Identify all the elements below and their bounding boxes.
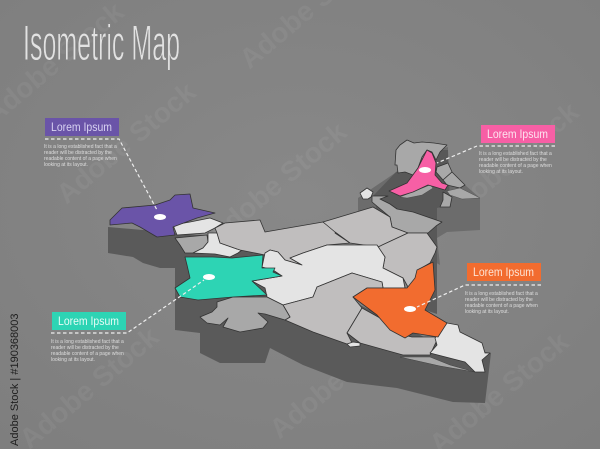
callout: orange	[404, 263, 541, 315]
map extrusion	[108, 147, 491, 403]
callout: pink: readable content of a page when	[479, 163, 552, 169]
callout: purple: reader will be distracted by the	[44, 150, 112, 156]
callout: orange: readable content of a page when	[465, 303, 538, 309]
stock id: Adobe Stock | #190368003	[9, 313, 21, 446]
map	[108, 140, 491, 403]
callout: teal	[51, 274, 215, 363]
callout: purple: Lorem Ipsum	[51, 122, 112, 134]
callout: teal: reader will be distracted by the	[51, 345, 119, 351]
callout: teal: readable content of a page when	[51, 351, 124, 357]
callout: orange: Lorem Ipsum	[473, 267, 534, 279]
callout: orange: reader will be distracted by the	[465, 297, 533, 303]
central regions	[173, 207, 490, 372]
callout: teal: It is a long established fact that a	[51, 339, 124, 345]
callout: orange: looking at its layout.	[465, 309, 509, 315]
callout: pink: looking at its layout.	[479, 169, 523, 175]
callout: pink: Lorem Ipsum	[487, 129, 548, 141]
callout: pink: It is a long established fact that a	[479, 151, 552, 157]
callout: purple	[44, 118, 166, 220]
highlighted region: purple	[110, 194, 215, 237]
title: Isometric Map	[23, 15, 180, 71]
callout: purple: looking at its layout.	[44, 162, 88, 168]
highlighted region: pink	[389, 150, 448, 196]
text: Adobe Stock	[433, 96, 585, 230]
highlighted region: orange	[353, 262, 447, 338]
callout: purple: It is a long established fact that a	[44, 144, 117, 150]
highlighted region: teal	[175, 255, 282, 300]
callout: orange: It is a long established fact that a	[465, 291, 538, 297]
callout: pink	[419, 125, 555, 175]
callout: teal: Lorem Ipsum	[58, 316, 119, 328]
north-east regions	[360, 140, 480, 233]
callout: pink: reader will be distracted by the	[479, 157, 547, 163]
callout: teal: looking at its layout.	[51, 357, 95, 363]
text: Adobe Stock	[201, 116, 353, 250]
callout: purple: readable content of a page when	[44, 156, 117, 162]
text: Adobe Stock	[50, 76, 202, 210]
text: Adobe Stock	[263, 311, 415, 445]
